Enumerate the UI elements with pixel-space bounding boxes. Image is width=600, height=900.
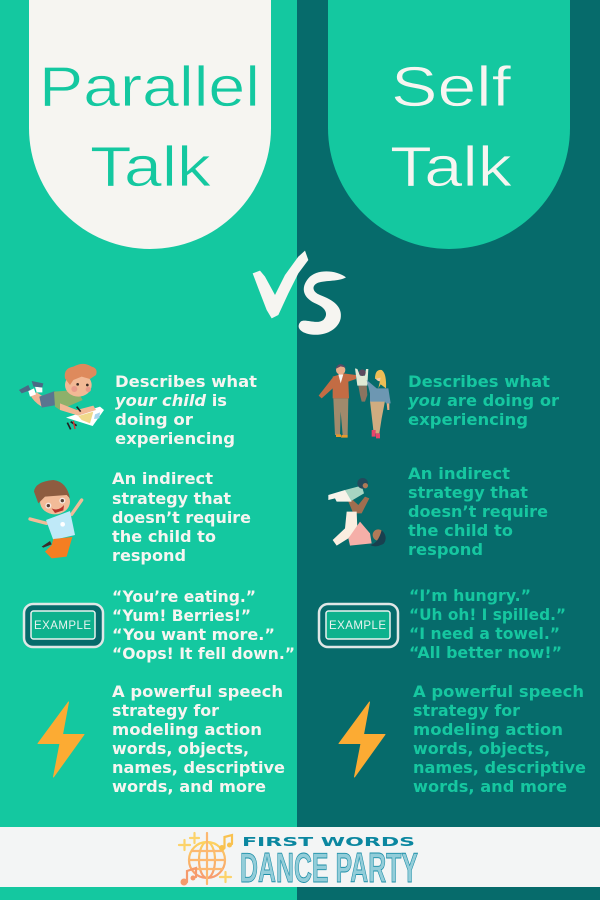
text: parallel talk examples: “You’re eating.” xyxy=(112,587,256,606)
text: describes you: experiencing xyxy=(408,410,528,429)
text: powerful strategy right: words, and more xyxy=(413,777,567,796)
text: describes your child: experiencing xyxy=(115,429,235,448)
title: Parallel Talk: Talk xyxy=(90,135,212,199)
text: powerful strategy right: modeling action xyxy=(413,720,563,739)
text: indirect strategy right: doesn’t require xyxy=(408,502,548,521)
title: Self Talk: Talk xyxy=(390,135,513,199)
panel: Self Talk title xyxy=(328,0,570,249)
logo text: Dance Party: DANCE PARTY xyxy=(240,844,418,891)
icon: example sign left xyxy=(24,604,103,647)
text: self talk examples: “I need a towel.” xyxy=(409,624,560,643)
title: Self Talk: Self xyxy=(391,55,511,119)
text: powerful strategy right: A powerful speech xyxy=(413,682,584,701)
text: powerful strategy left: modeling action xyxy=(112,720,262,739)
text: powerful strategy right xyxy=(413,682,586,796)
text: indirect strategy left: the child to xyxy=(112,527,216,546)
icon: example sign right: EXAMPLE xyxy=(329,620,386,632)
icon: boy lying down and drawing xyxy=(19,364,104,429)
text: self talk examples: “I’m hungry.” xyxy=(409,586,531,605)
icon: lightning bolt left xyxy=(38,702,84,777)
text: describes you: Describes what xyxy=(408,372,550,391)
icon: disco globe with notes xyxy=(179,833,232,886)
logo text: First Words: FIRST WORDS xyxy=(242,834,415,849)
footer band: First Words Dance Party logo xyxy=(0,827,600,891)
text: describes you: you are doing or xyxy=(408,391,559,410)
icon: lightning bolt right xyxy=(339,702,385,777)
text: indirect strategy right: strategy that xyxy=(408,483,528,502)
text: parallel talk examples: “Oops! It fell down.” xyxy=(112,644,295,663)
text: indirect strategy left: An indirect xyxy=(112,469,213,488)
text: powerful strategy left xyxy=(112,682,285,796)
text: self talk examples: “All better now!” xyxy=(409,643,562,662)
panel: Parallel Talk title xyxy=(29,0,271,249)
text: self talk examples: “Uh oh! I spilled.” xyxy=(409,605,566,624)
text: describes your child xyxy=(115,372,257,448)
text: powerful strategy left: words, and more xyxy=(112,777,266,796)
text: indirect strategy right: the child to xyxy=(408,521,513,540)
text: indirect strategy right xyxy=(408,464,548,559)
text: describes your child: Describes what xyxy=(115,372,257,391)
icon: family walking xyxy=(319,364,391,438)
text: describes you xyxy=(408,372,559,429)
text: powerful strategy right: strategy for xyxy=(413,701,520,720)
text: parallel talk examples: “You want more.” xyxy=(112,625,275,644)
text: indirect strategy right: respond xyxy=(408,540,483,559)
text: describes your child: doing or xyxy=(115,410,193,429)
text: self talk examples xyxy=(409,586,566,662)
text: indirect strategy left: doesn’t require xyxy=(112,508,251,527)
text: parallel talk examples xyxy=(112,587,295,663)
text: parallel talk examples: “Yum! Berries!” xyxy=(112,606,251,625)
text: powerful strategy left: strategy for xyxy=(112,701,219,720)
text: powerful strategy left: words, objects, xyxy=(112,739,249,758)
icon: brush VS xyxy=(253,251,346,335)
icon: example sign right xyxy=(319,604,398,647)
text: indirect strategy left: respond xyxy=(112,546,186,565)
icon: example sign left: EXAMPLE xyxy=(34,620,91,632)
text: powerful strategy left: names, descriptive xyxy=(112,758,285,777)
text: indirect strategy left xyxy=(112,469,251,565)
text: indirect strategy left: strategy that xyxy=(112,489,231,508)
text: powerful strategy left: A powerful speech xyxy=(112,682,283,701)
text: describes your child: your child is xyxy=(115,391,227,410)
icon: parent lifting child xyxy=(328,478,386,546)
title: Parallel Talk: Parallel xyxy=(39,55,260,119)
icon: jumping boy xyxy=(30,480,82,558)
text: powerful strategy right: names, descriptive xyxy=(413,758,586,777)
text: indirect strategy right: An indirect xyxy=(408,464,510,483)
text: powerful strategy right: words, objects, xyxy=(413,739,550,758)
